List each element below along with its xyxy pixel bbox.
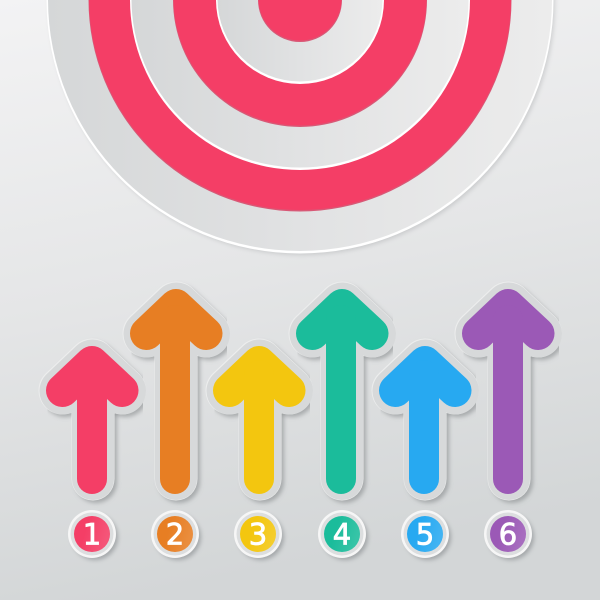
arrow 3: yellow [230, 362, 292, 482]
arrow 4: teal [312, 306, 375, 482]
number badge 5 [401, 510, 451, 560]
number badge 4: 4 [333, 518, 351, 552]
number badge 2: 2 [166, 518, 184, 552]
number badge 5: 5 [416, 518, 434, 552]
number badge 3 [234, 510, 284, 560]
target [46, 0, 555, 255]
arrow 6: purple [478, 306, 541, 482]
number badge 3: 3 [249, 518, 267, 552]
number badge 4 [318, 510, 368, 560]
number badge 6: 6 [499, 518, 517, 552]
arrow 1: pink [62, 362, 125, 482]
number badge 1 [68, 510, 118, 560]
number badge 2 [151, 510, 201, 560]
number badge 6 [484, 510, 534, 560]
number badge 1: 1 [83, 518, 101, 552]
arrow 2: orange [146, 306, 209, 482]
arrow 5: blue [396, 362, 458, 482]
